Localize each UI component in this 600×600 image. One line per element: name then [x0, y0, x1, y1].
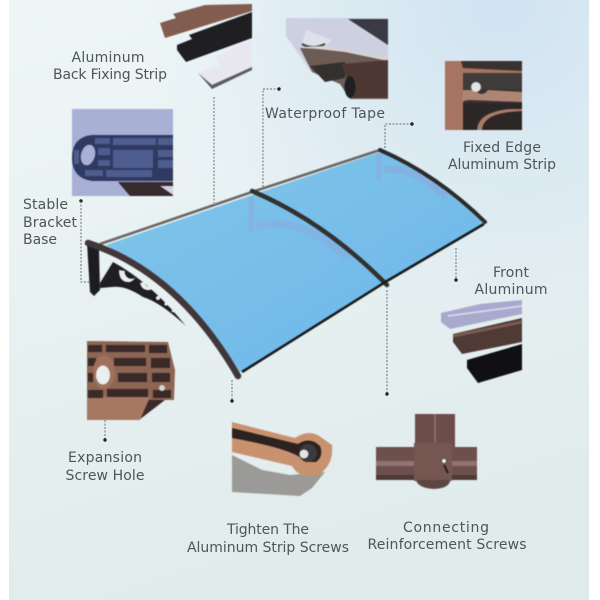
leader: bracket base: [79, 199, 90, 282]
leader: expansion screw hole: [103, 420, 107, 442]
polycarbonate blue panel: [106, 152, 484, 372]
thumbnail: aluminum back fixing strip: [160, 4, 252, 89]
label: stable bracket base: Bracket: [23, 215, 78, 231]
label: aluminum back fixing strip: [53, 50, 167, 83]
thumbnail: tighten aluminum strip screws: [232, 422, 332, 496]
label: front aluminum: Front: [493, 265, 530, 281]
thumbnail: waterproof tape: [286, 18, 388, 99]
right rib: [380, 150, 485, 222]
label: connecting reinforcement screws: Reinforcement Screws: [368, 537, 526, 553]
label: fixed edge aluminum strip: Fixed Edge: [463, 140, 541, 156]
leader: back fixing strip: [213, 97, 215, 203]
label: connecting reinforcement screws: [368, 520, 526, 553]
decorative bracket: [87, 243, 186, 326]
label: front aluminum: [474, 265, 548, 298]
thumbnail: front aluminum strips: [441, 300, 522, 383]
center rib: [252, 191, 387, 285]
thumbnail: fixed edge aluminum strip: [445, 61, 522, 130]
label: stable bracket base: Base: [23, 232, 57, 248]
left arc rib: [88, 243, 238, 376]
label: aluminum back fixing strip: Aluminum: [72, 50, 144, 66]
awning illustration: [87, 150, 485, 376]
label: connecting reinforcement screws: Connecting: [403, 520, 489, 536]
label: tighten the aluminum strip screws: Tighten The: [226, 522, 309, 538]
label: expansion screw hole: Expansion: [68, 450, 142, 466]
front edge: [242, 224, 484, 372]
leader: fixed edge: [385, 122, 414, 148]
label: tighten the aluminum strip screws: [187, 522, 349, 556]
thumbnail: connecting reinforcement screws: [376, 414, 477, 489]
label: expansion screw hole: Screw Hole: [66, 468, 144, 484]
label: waterproof tape: Waterproof Tape: [265, 106, 385, 122]
far bracket ghost: [251, 153, 446, 258]
label: stable bracket base: [23, 197, 78, 248]
leader: tighten screws: [230, 380, 234, 403]
back edge strip: [100, 150, 380, 244]
leader: front aluminum: [454, 248, 458, 282]
label: tighten the aluminum strip screws: Aluminum Strip Screws: [187, 540, 349, 556]
label: fixed edge aluminum strip: [448, 140, 556, 173]
leader: connecting screws: [385, 290, 389, 396]
label: aluminum back fixing strip: Back Fixing Strip: [53, 67, 167, 83]
thumbnail: stable bracket base: [72, 109, 173, 196]
label: fixed edge aluminum strip: Aluminum Strip: [448, 157, 556, 173]
thumbnail: expansion screw hole: [87, 341, 175, 420]
label: stable bracket base: Stable: [23, 197, 68, 213]
label: expansion screw hole: [66, 450, 144, 484]
leader: waterproof tape: [263, 87, 281, 187]
label: front aluminum: Aluminum: [474, 282, 548, 298]
